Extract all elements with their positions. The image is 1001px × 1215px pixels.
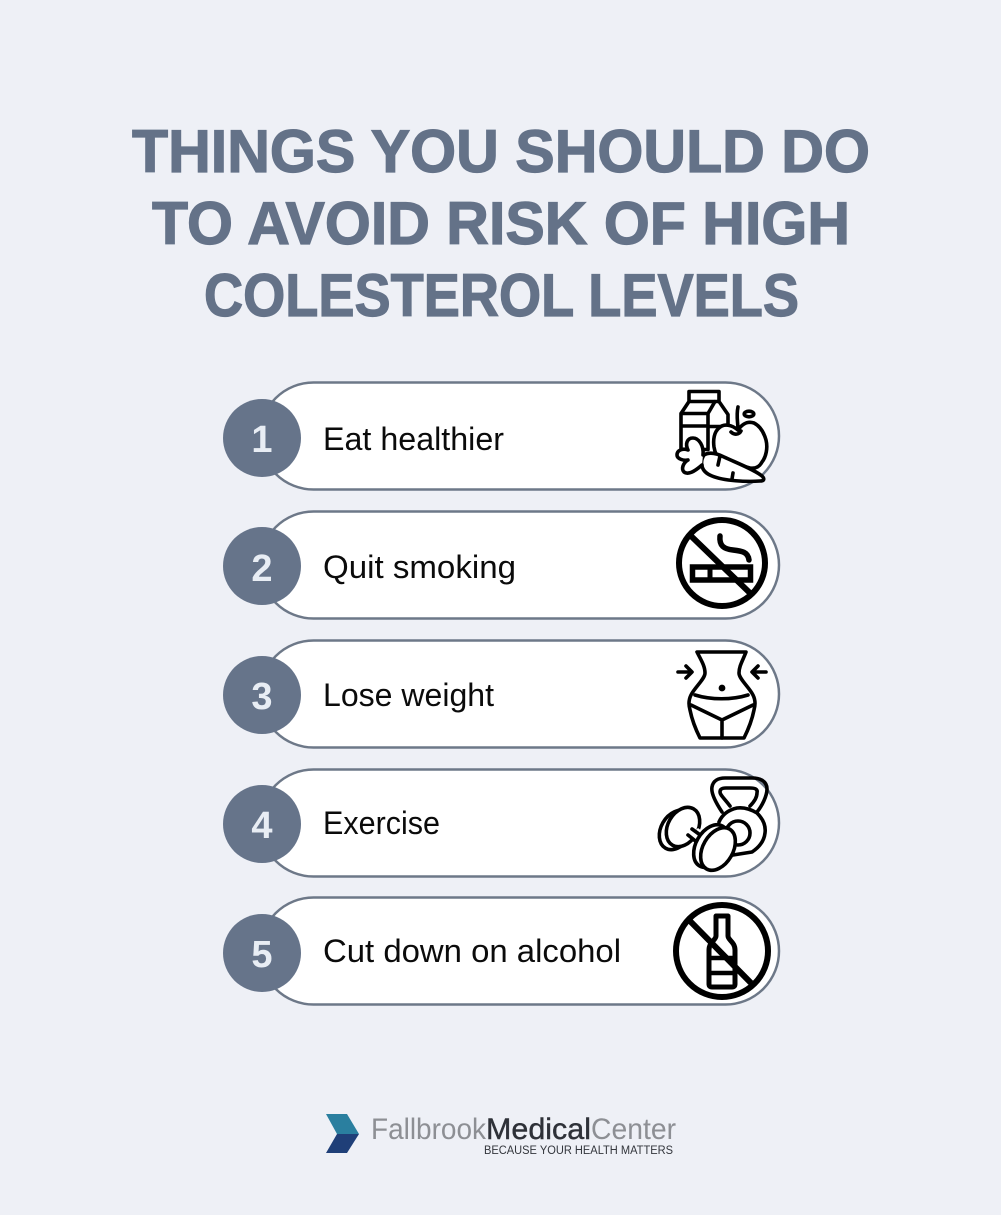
title: COLESTEROL LEVELS (204, 262, 799, 329)
number badge 3: 3 (251, 676, 273, 718)
item 4: exercise (223, 770, 779, 876)
label: quit smoking: Quit smoking (323, 549, 516, 585)
label: exercise: Exercise (323, 805, 440, 841)
item 5: cut down on alcohol (223, 898, 779, 1004)
number badge 5 (223, 914, 301, 992)
logo wordmark (371, 1113, 676, 1146)
number badge 4 (223, 785, 301, 863)
icon: no smoking sign (679, 520, 765, 606)
label: lose weight: Lose weight (323, 677, 494, 713)
item 1: eat healthier (223, 382, 779, 490)
logo wordmark: Center (591, 1113, 676, 1146)
number badge 3 (223, 656, 301, 734)
number badge 4: 4 (251, 805, 273, 847)
logo chevron icon (326, 1114, 359, 1153)
label: eat healthier: Eat healthier (323, 421, 504, 457)
logo wordmark: Fallbrook (371, 1113, 487, 1146)
icon: no alcohol sign (676, 905, 768, 997)
item 2: quit smoking (223, 512, 779, 618)
title: TO AVOID RISK OF HIGH (152, 190, 850, 257)
logo wordmark: Medical (486, 1113, 591, 1146)
title (132, 118, 870, 329)
number badge 5: 5 (251, 934, 273, 976)
icon: kettlebell and dumbbell (653, 778, 767, 876)
item 3: lose weight (223, 640, 779, 748)
number badge 1 (223, 399, 301, 477)
number badge 1: 1 (251, 419, 273, 461)
logo: Fallbrook Medical Center (326, 1113, 676, 1157)
number badge 2: 2 (251, 548, 273, 590)
icon: milk carton, apple and carrot (677, 392, 767, 481)
icon: waist with inward arrows (678, 652, 766, 738)
label: cut down on alcohol: Cut down on alcohol (323, 933, 621, 969)
title: THINGS YOU SHOULD DO (132, 118, 870, 185)
number badge 2 (223, 527, 301, 605)
logo tagline: BECAUSE YOUR HEALTH MATTERS (484, 1145, 673, 1157)
